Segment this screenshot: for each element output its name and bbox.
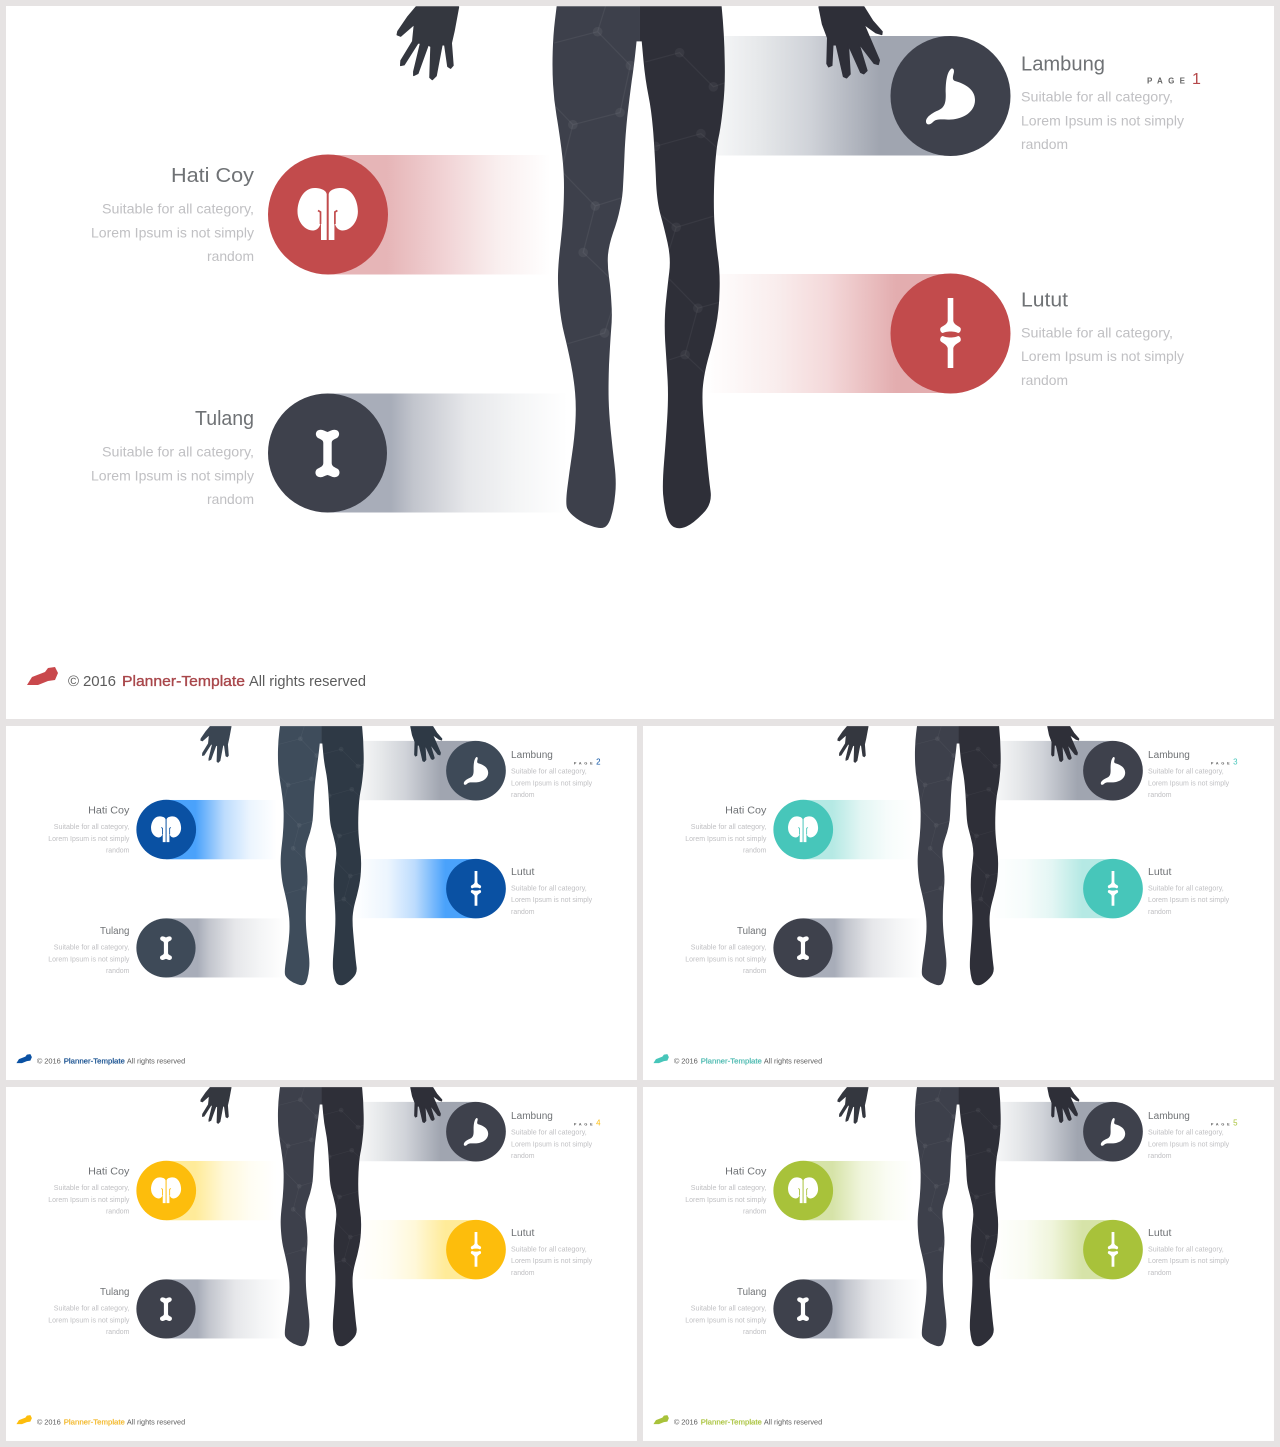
callout: Hati Coy: random [106, 1209, 130, 1216]
band: Lambung gradient [996, 741, 1113, 800]
body silhouette [838, 1087, 1079, 1346]
callout: Lutut: Suitable for all category, [511, 885, 587, 892]
icon: kidney [136, 800, 196, 859]
band: Hati Coy gradient [166, 800, 283, 859]
page label: 2 [596, 758, 601, 767]
band: Lutut gradient [991, 1220, 1113, 1279]
callout: Lambung: random [1148, 1153, 1172, 1160]
callout: Lambung: Lambung [1021, 54, 1105, 76]
band: Hati Coy gradient [328, 155, 562, 274]
footer: Planner-Template [64, 1418, 125, 1427]
footer: Planner-Template [64, 1057, 125, 1066]
callout: Hati Coy: Suitable for all category, [54, 824, 129, 831]
callout: Lambung: Suitable for all category, [1021, 89, 1173, 105]
callout: Tulang: Lorem Ipsum is not simply [48, 957, 130, 964]
callout: Tulang [685, 926, 767, 975]
callout: Tulang: Tulang [100, 1287, 129, 1298]
footer: Planner-Template [701, 1057, 762, 1066]
footer: Planner-Template [701, 1418, 762, 1427]
callout: Lambung [511, 1111, 593, 1160]
callout: Lutut: random [1021, 372, 1068, 388]
band: Tulang gradient [803, 1279, 929, 1338]
callout: Tulang: Suitable for all category, [691, 1306, 766, 1313]
footer: © 2016 [674, 1418, 698, 1427]
callout: Lutut [511, 1228, 593, 1277]
callout: Tulang: Lorem Ipsum is not simply [48, 1318, 130, 1325]
callout: Lambung: Lorem Ipsum is not simply [1021, 113, 1184, 129]
band: Lambung gradient [359, 1102, 476, 1161]
page label: 4 [596, 1119, 601, 1128]
callout: Tulang: random [743, 968, 767, 975]
callout: Lutut: Lutut [1021, 290, 1068, 312]
band: Lambung gradient [996, 1102, 1113, 1161]
band: Lambung gradient [715, 36, 950, 156]
band: Tulang gradient [166, 1279, 292, 1338]
panel: slide 5 green [643, 1087, 1274, 1441]
callout: Hati Coy: Hati Coy [725, 1166, 766, 1177]
callout: Tulang: random [207, 491, 254, 507]
callout: Lutut: Lutut [511, 1228, 535, 1239]
footer [27, 667, 366, 690]
footer [653, 1415, 822, 1427]
callout: Lambung: random [1021, 136, 1068, 152]
footer: © 2016 [37, 1057, 61, 1066]
body silhouette [397, 6, 882, 528]
footer: All rights reserved [127, 1418, 185, 1427]
callout: Hati Coy [48, 1166, 130, 1216]
callout: Lambung: Suitable for all category, [511, 769, 587, 776]
callout: Tulang: Suitable for all category, [102, 444, 254, 460]
callout: Lambung [1148, 750, 1230, 799]
callout: Tulang [48, 926, 130, 975]
callout: Lutut: Lorem Ipsum is not simply [1148, 1258, 1230, 1265]
band: Hati Coy gradient [166, 1161, 283, 1220]
footer [653, 1054, 822, 1066]
footer: Planner-Template [122, 673, 245, 690]
icon: kidney [773, 800, 833, 859]
page label: PAGE [1211, 760, 1230, 765]
callout: Hati Coy: random [106, 848, 130, 855]
callout: Hati Coy [685, 805, 767, 855]
callout: Lutut: Lorem Ipsum is not simply [1148, 897, 1230, 904]
icon: bone [773, 1279, 833, 1338]
callout: Lambung [511, 750, 593, 799]
callout: Lutut: random [1148, 909, 1172, 916]
callout: Lambung: random [1148, 792, 1172, 799]
icon: bone [268, 394, 387, 512]
page label: PAGE [1211, 1121, 1230, 1126]
callout: Lutut [511, 867, 593, 916]
callout: Lambung: Lambung [1148, 1111, 1190, 1122]
icon: kidney [136, 1161, 196, 1220]
band: Hati Coy gradient [803, 800, 920, 859]
footer: All rights reserved [249, 673, 366, 690]
callout: Tulang: random [106, 1329, 130, 1336]
callout: Hati Coy: Hati Coy [88, 805, 129, 816]
callout: Lutut: Lutut [1148, 867, 1172, 878]
footer: All rights reserved [127, 1057, 185, 1066]
icon: knee [1083, 859, 1143, 918]
callout: Tulang: Suitable for all category, [54, 1306, 129, 1313]
band: Tulang gradient [328, 394, 580, 512]
callout: Lutut: Lutut [511, 867, 535, 878]
band: Lutut gradient [354, 859, 476, 918]
callout: Hati Coy: random [743, 848, 767, 855]
callout: Lutut: random [1148, 1270, 1172, 1277]
page label: PAGE [1147, 76, 1186, 86]
page label: PAGE [574, 1121, 593, 1126]
page label: 3 [1233, 758, 1238, 767]
callout: Lutut [1148, 867, 1230, 916]
callout: Lambung: Lambung [511, 1111, 553, 1122]
callout: Lambung [1148, 1111, 1230, 1160]
callout: Tulang: Lorem Ipsum is not simply [685, 957, 767, 964]
callout: Lutut: Lorem Ipsum is not simply [511, 897, 593, 904]
callout: Lutut: Suitable for all category, [1021, 324, 1173, 340]
callout: Lambung: Suitable for all category, [1148, 1130, 1224, 1137]
callout: Hati Coy: Hati Coy [171, 165, 254, 187]
page label [1147, 71, 1201, 88]
footer: © 2016 [674, 1057, 698, 1066]
footer: © 2016 [68, 673, 116, 690]
callout: Tulang: random [106, 968, 130, 975]
callout: Tulang: Tulang [737, 926, 766, 937]
callout: Lutut: Lorem Ipsum is not simply [1021, 348, 1184, 364]
footer [16, 1415, 185, 1427]
page label: 1 [1192, 71, 1201, 88]
callout: Tulang [685, 1287, 767, 1336]
callout: Hati Coy: Lorem Ipsum is not simply [48, 836, 130, 843]
footer: All rights reserved [764, 1418, 822, 1427]
callout: Hati Coy: Suitable for all category, [691, 1185, 766, 1192]
panel: slide 3 teal [643, 726, 1274, 1080]
callout: Lambung: Lorem Ipsum is not simply [511, 780, 593, 787]
callout: Tulang: Tulang [737, 1287, 766, 1298]
footer: All rights reserved [764, 1057, 822, 1066]
page label: PAGE [574, 760, 593, 765]
footer: © 2016 [37, 1418, 61, 1427]
callout: Tulang: Lorem Ipsum is not simply [685, 1318, 767, 1325]
icon: stomach [446, 1102, 506, 1161]
callout: Hati Coy [91, 165, 254, 264]
callout: Hati Coy [685, 1166, 767, 1216]
panel: slide 1 red [6, 6, 1274, 719]
callout: Lambung: Lorem Ipsum is not simply [511, 1141, 593, 1148]
band: Tulang gradient [166, 918, 292, 977]
callout: Lambung: Lorem Ipsum is not simply [1148, 780, 1230, 787]
callout: Hati Coy: Suitable for all category, [54, 1185, 129, 1192]
page label [1211, 758, 1238, 767]
body silhouette [201, 1087, 442, 1346]
callout: Lambung: Lambung [1148, 750, 1190, 761]
callout: Lutut [1021, 290, 1184, 388]
callout: Hati Coy: Lorem Ipsum is not simply [48, 1197, 130, 1204]
icon: stomach [446, 741, 506, 800]
icon: stomach [890, 36, 1010, 156]
callout: Hati Coy: Suitable for all category, [691, 824, 766, 831]
icon: knee [446, 1220, 506, 1279]
callout: Hati Coy: Lorem Ipsum is not simply [91, 224, 254, 240]
callout: Hati Coy: Suitable for all category, [102, 200, 254, 216]
callout: Lutut: Suitable for all category, [1148, 1246, 1224, 1253]
callout: Lutut: Lorem Ipsum is not simply [511, 1258, 593, 1265]
page label [1211, 1119, 1238, 1128]
footer [16, 1054, 185, 1066]
callout: Hati Coy: Lorem Ipsum is not simply [685, 1197, 767, 1204]
callout: Lambung: Suitable for all category, [1148, 769, 1224, 776]
callout: Hati Coy: Hati Coy [88, 1166, 129, 1177]
callout: Tulang [48, 1287, 130, 1336]
body silhouette [838, 726, 1079, 985]
callout: Hati Coy: Hati Coy [725, 805, 766, 816]
band: Tulang gradient [803, 918, 929, 977]
callout: Tulang: Suitable for all category, [691, 945, 766, 952]
callout: Tulang [91, 408, 254, 507]
icon: knee [446, 859, 506, 918]
callout: Lambung: random [511, 1153, 535, 1160]
callout: Lutut: random [511, 909, 535, 916]
callout: Tulang: Lorem Ipsum is not simply [91, 468, 254, 484]
icon: knee [890, 274, 1010, 394]
band: Hati Coy gradient [803, 1161, 920, 1220]
callout: Tulang: random [743, 1329, 767, 1336]
icon: bone [136, 918, 196, 977]
callout: Tulang: Tulang [195, 408, 254, 430]
callout: Lutut: random [511, 1270, 535, 1277]
callout: Hati Coy: Lorem Ipsum is not simply [685, 836, 767, 843]
icon: bone [773, 918, 833, 977]
page label [574, 758, 601, 767]
band: Lutut gradient [705, 274, 950, 393]
callout: Lambung: Suitable for all category, [511, 1130, 587, 1137]
callout: Lutut: Suitable for all category, [1148, 885, 1224, 892]
callout: Lambung: Lambung [511, 750, 553, 761]
icon: knee [1083, 1220, 1143, 1279]
icon: stomach [1083, 741, 1143, 800]
callout: Hati Coy: random [743, 1209, 767, 1216]
body silhouette [201, 726, 442, 985]
callout: Lambung [1021, 54, 1184, 152]
panel: slide 4 yellow [6, 1087, 637, 1441]
callout: Tulang: Suitable for all category, [54, 945, 129, 952]
page label [574, 1119, 601, 1128]
callout: Hati Coy [48, 805, 130, 855]
panel: slide 2 blue [6, 726, 637, 1080]
band: Lutut gradient [354, 1220, 476, 1279]
callout: Lambung: random [511, 792, 535, 799]
icon: bone [136, 1279, 196, 1338]
callout: Hati Coy: random [207, 248, 254, 264]
page label: 5 [1233, 1119, 1238, 1128]
band: Lambung gradient [359, 741, 476, 800]
callout: Lutut [1148, 1228, 1230, 1277]
callout: Tulang: Tulang [100, 926, 129, 937]
icon: stomach [1083, 1102, 1143, 1161]
callout: Lambung: Lorem Ipsum is not simply [1148, 1141, 1230, 1148]
band: Lutut gradient [991, 859, 1113, 918]
callout: Lutut: Suitable for all category, [511, 1246, 587, 1253]
icon: kidney [268, 154, 388, 274]
icon: kidney [773, 1161, 833, 1220]
callout: Lutut: Lutut [1148, 1228, 1172, 1239]
